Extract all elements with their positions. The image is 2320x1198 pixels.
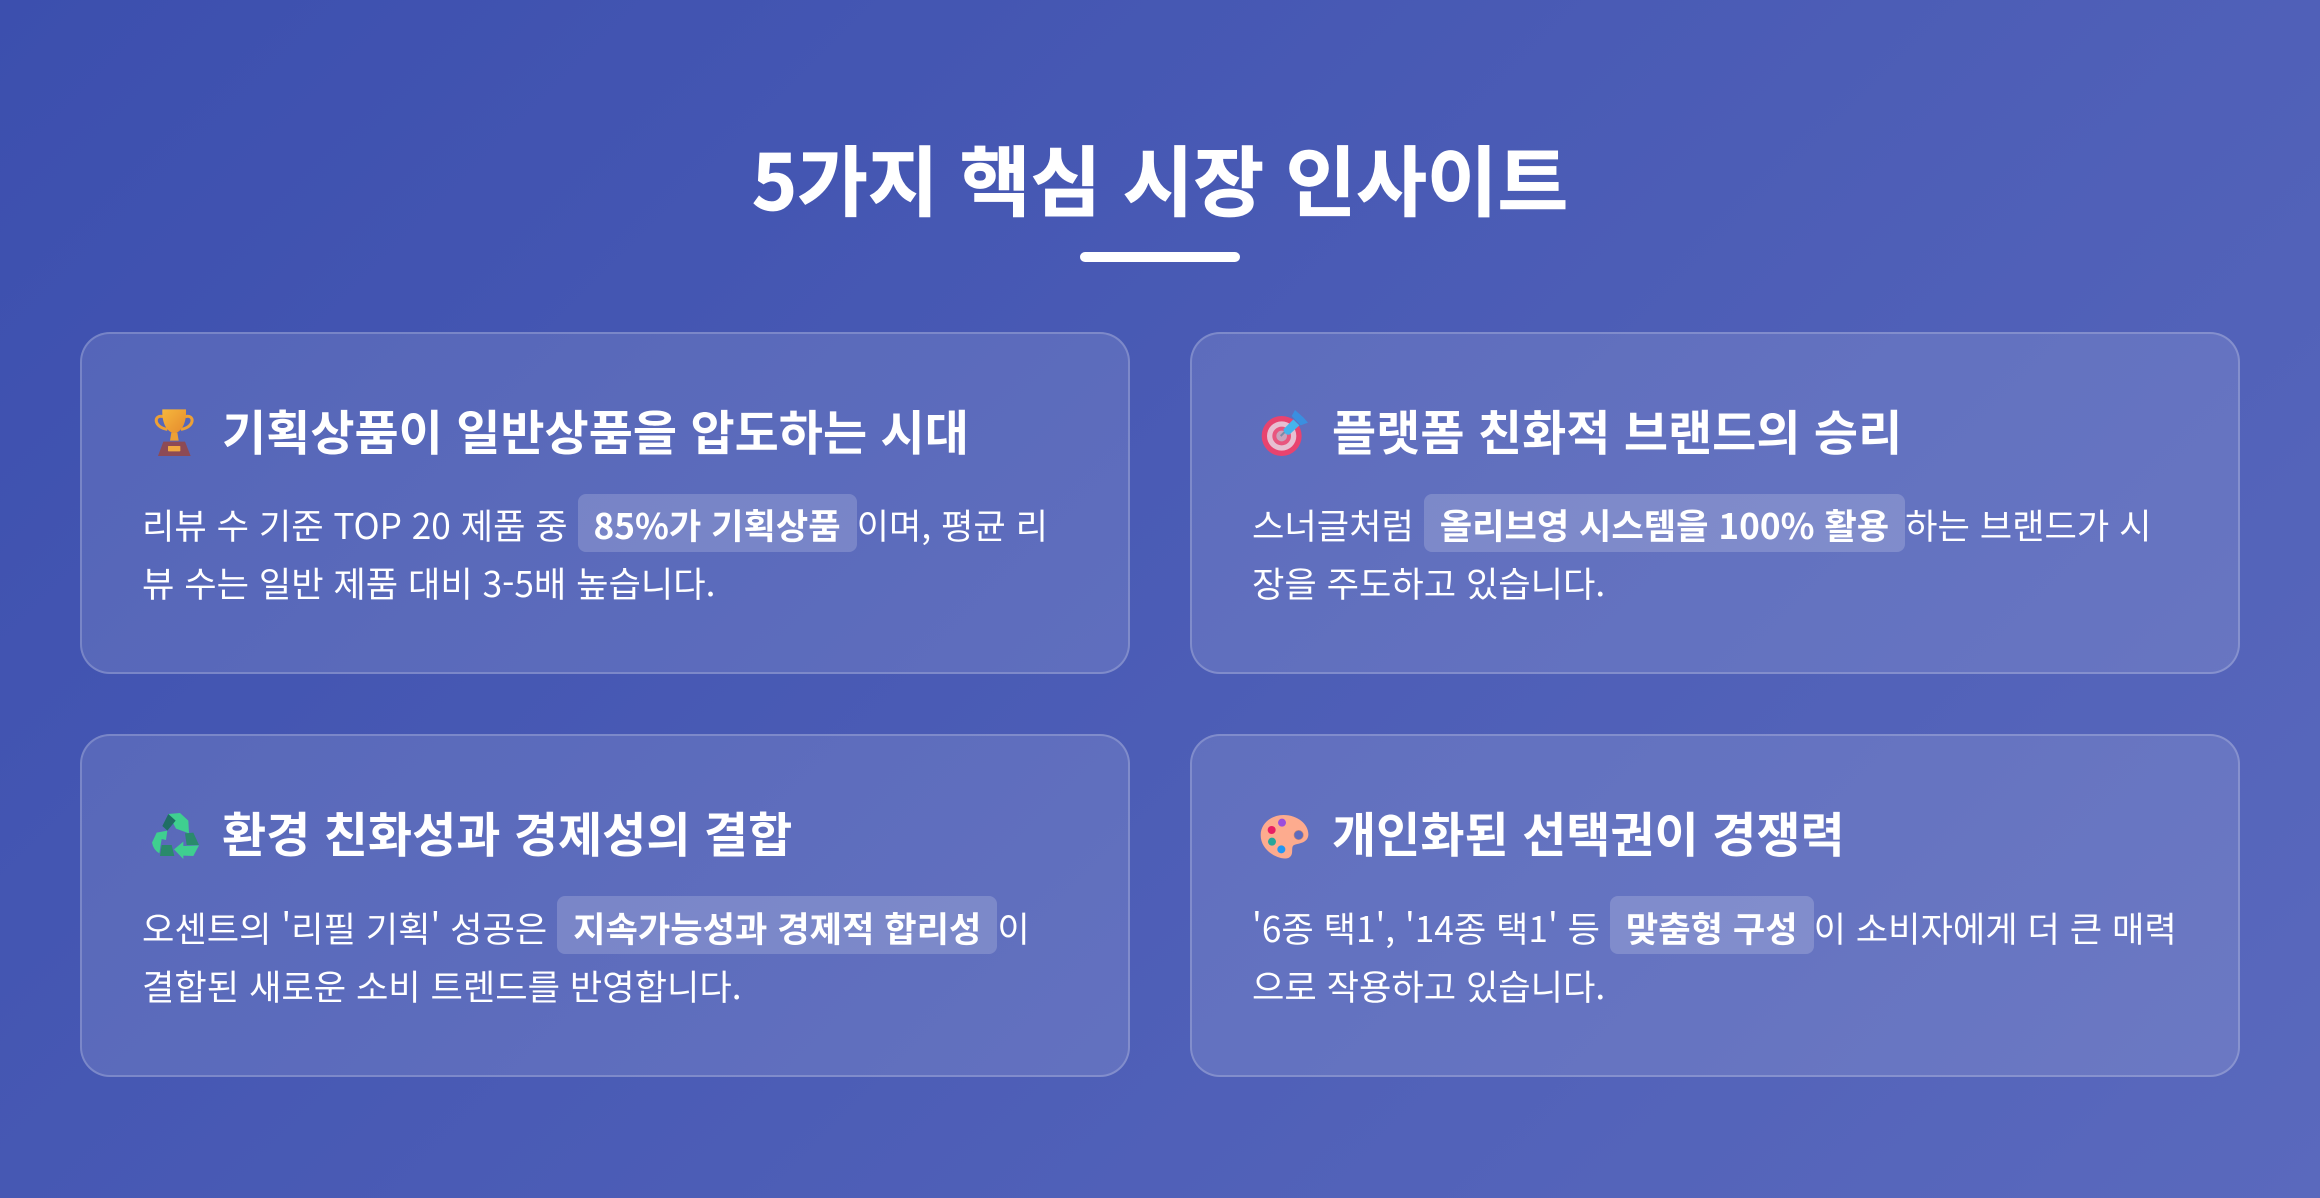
icon: palette [1260,815,1308,858]
body line 1: 맞춤형 구성 [1626,902,1798,953]
body line 2: 결합된 새로운 소비 트렌드를 반영합니다. [142,960,742,1011]
title: 5가지 핵심 시장 인사이트 [752,122,1568,233]
panel: 플랫폼 [1190,332,2240,674]
icon: trophy [154,409,194,456]
panel: 개인화 [1190,734,2240,1077]
icon: target [1262,410,1308,456]
card heading: 환경 친화성과 경제성의 결합 [222,796,792,866]
body line 2: 으로 작용하고 있습니다. [1252,960,1605,1011]
icon: recycle [152,813,199,859]
panel: 환경 친화 [80,734,1130,1077]
body line 1: 오센트의 '리필 기획' 성공은 이 [142,902,1030,953]
card heading: 플랫폼 친화적 브랜드의 승리 [1332,394,1902,464]
body line 1: 지속가능성과 경제적 합리성 [573,902,981,953]
card heading: 개인화된 선택권이 경쟁력 [1332,796,1845,866]
body line 1: '6종 택1', '14종 택1' 등 이 소비자에게 더 큰 매력 [1252,902,2177,953]
body line 1: 85%가 기획상품 [594,499,841,550]
body line 1: 올리브영 시스템을 100% 활용 [1440,499,1889,550]
panel: 기획상품 [80,332,1130,674]
card heading: 기획상품이 일반상품을 압도하는 시대 [222,394,969,464]
title underline [1080,252,1240,262]
body line 1: 리뷰 수 기준 TOP 20 제품 중 이며, 평균 리 [142,499,1048,550]
body line 2: 뷰 수는 일반 제품 대비 3-5배 높습니다. [142,557,715,608]
body line 1: 스너글처럼 하는 브랜드가 시 [1252,499,2151,550]
body line 2: 장을 주도하고 있습니다. [1252,557,1605,608]
